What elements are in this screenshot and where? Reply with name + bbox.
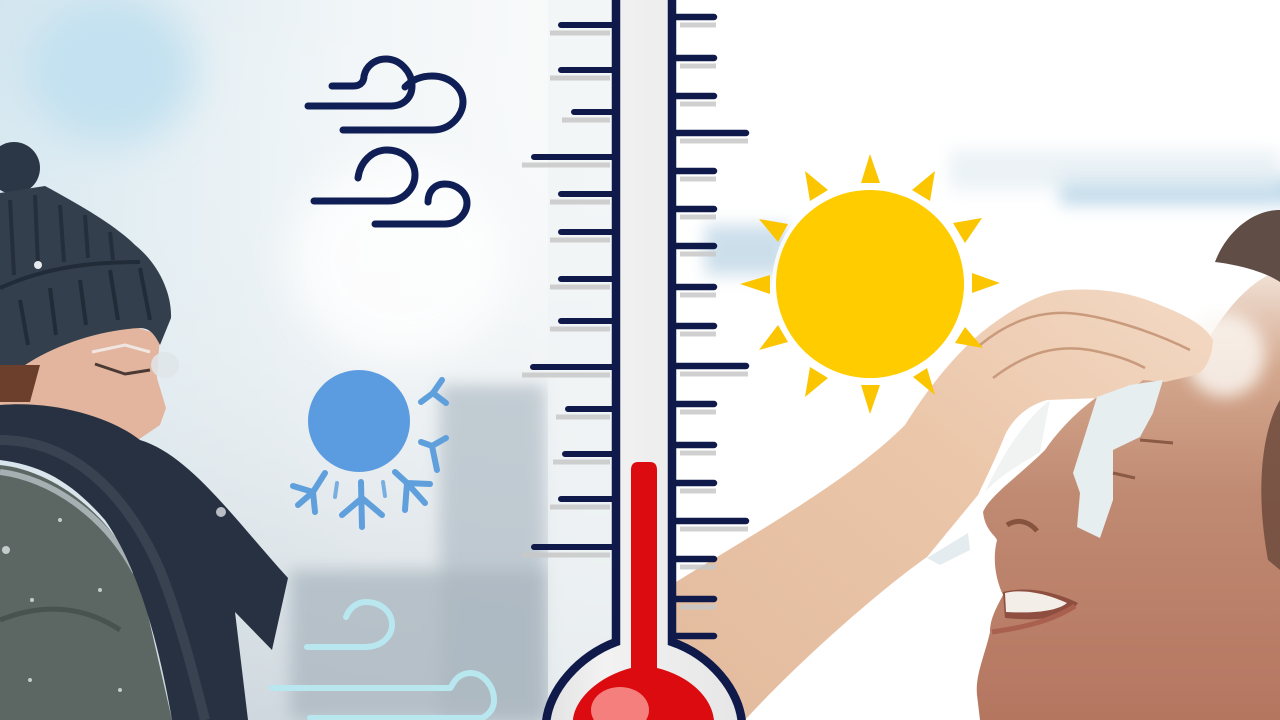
arm and hand [676, 290, 1213, 720]
side hair [1261, 400, 1280, 570]
lower tissue [927, 533, 970, 565]
mercury [573, 462, 714, 720]
icon: pale wind bottom [272, 602, 494, 718]
eye [95, 364, 150, 374]
tick shadows [522, 25, 748, 607]
nostril [1007, 521, 1037, 531]
photo: woman wiping her forehead with a tissue [676, 210, 1280, 720]
mouth [1003, 590, 1078, 619]
finger lines [980, 313, 1190, 378]
face [977, 270, 1280, 720]
icon: sun [740, 154, 1000, 414]
teeth [1005, 591, 1067, 612]
icon: cold sun with snowflakes [293, 370, 446, 527]
beanie hat [0, 142, 171, 365]
icon: dark wind top [308, 59, 467, 224]
right tick marks [676, 17, 746, 636]
hair [0, 365, 40, 402]
glass tube [546, 0, 742, 720]
thermometer [522, 0, 748, 720]
bulb highlight [591, 687, 649, 720]
white tissue sliver [985, 400, 1050, 492]
tissue [1073, 380, 1163, 538]
left tick marks [533, 25, 612, 547]
forehead highlight [1185, 313, 1265, 397]
eyelashes [1113, 440, 1173, 478]
scarf [0, 404, 288, 720]
tube outline [546, 0, 742, 720]
photo: woman in winter clothes [0, 142, 288, 720]
hair [1215, 210, 1280, 282]
jacket [0, 465, 172, 720]
lower lip [992, 606, 1075, 632]
frost on eyebrow [92, 345, 150, 352]
snow flecks [2, 507, 226, 692]
face [0, 325, 166, 442]
